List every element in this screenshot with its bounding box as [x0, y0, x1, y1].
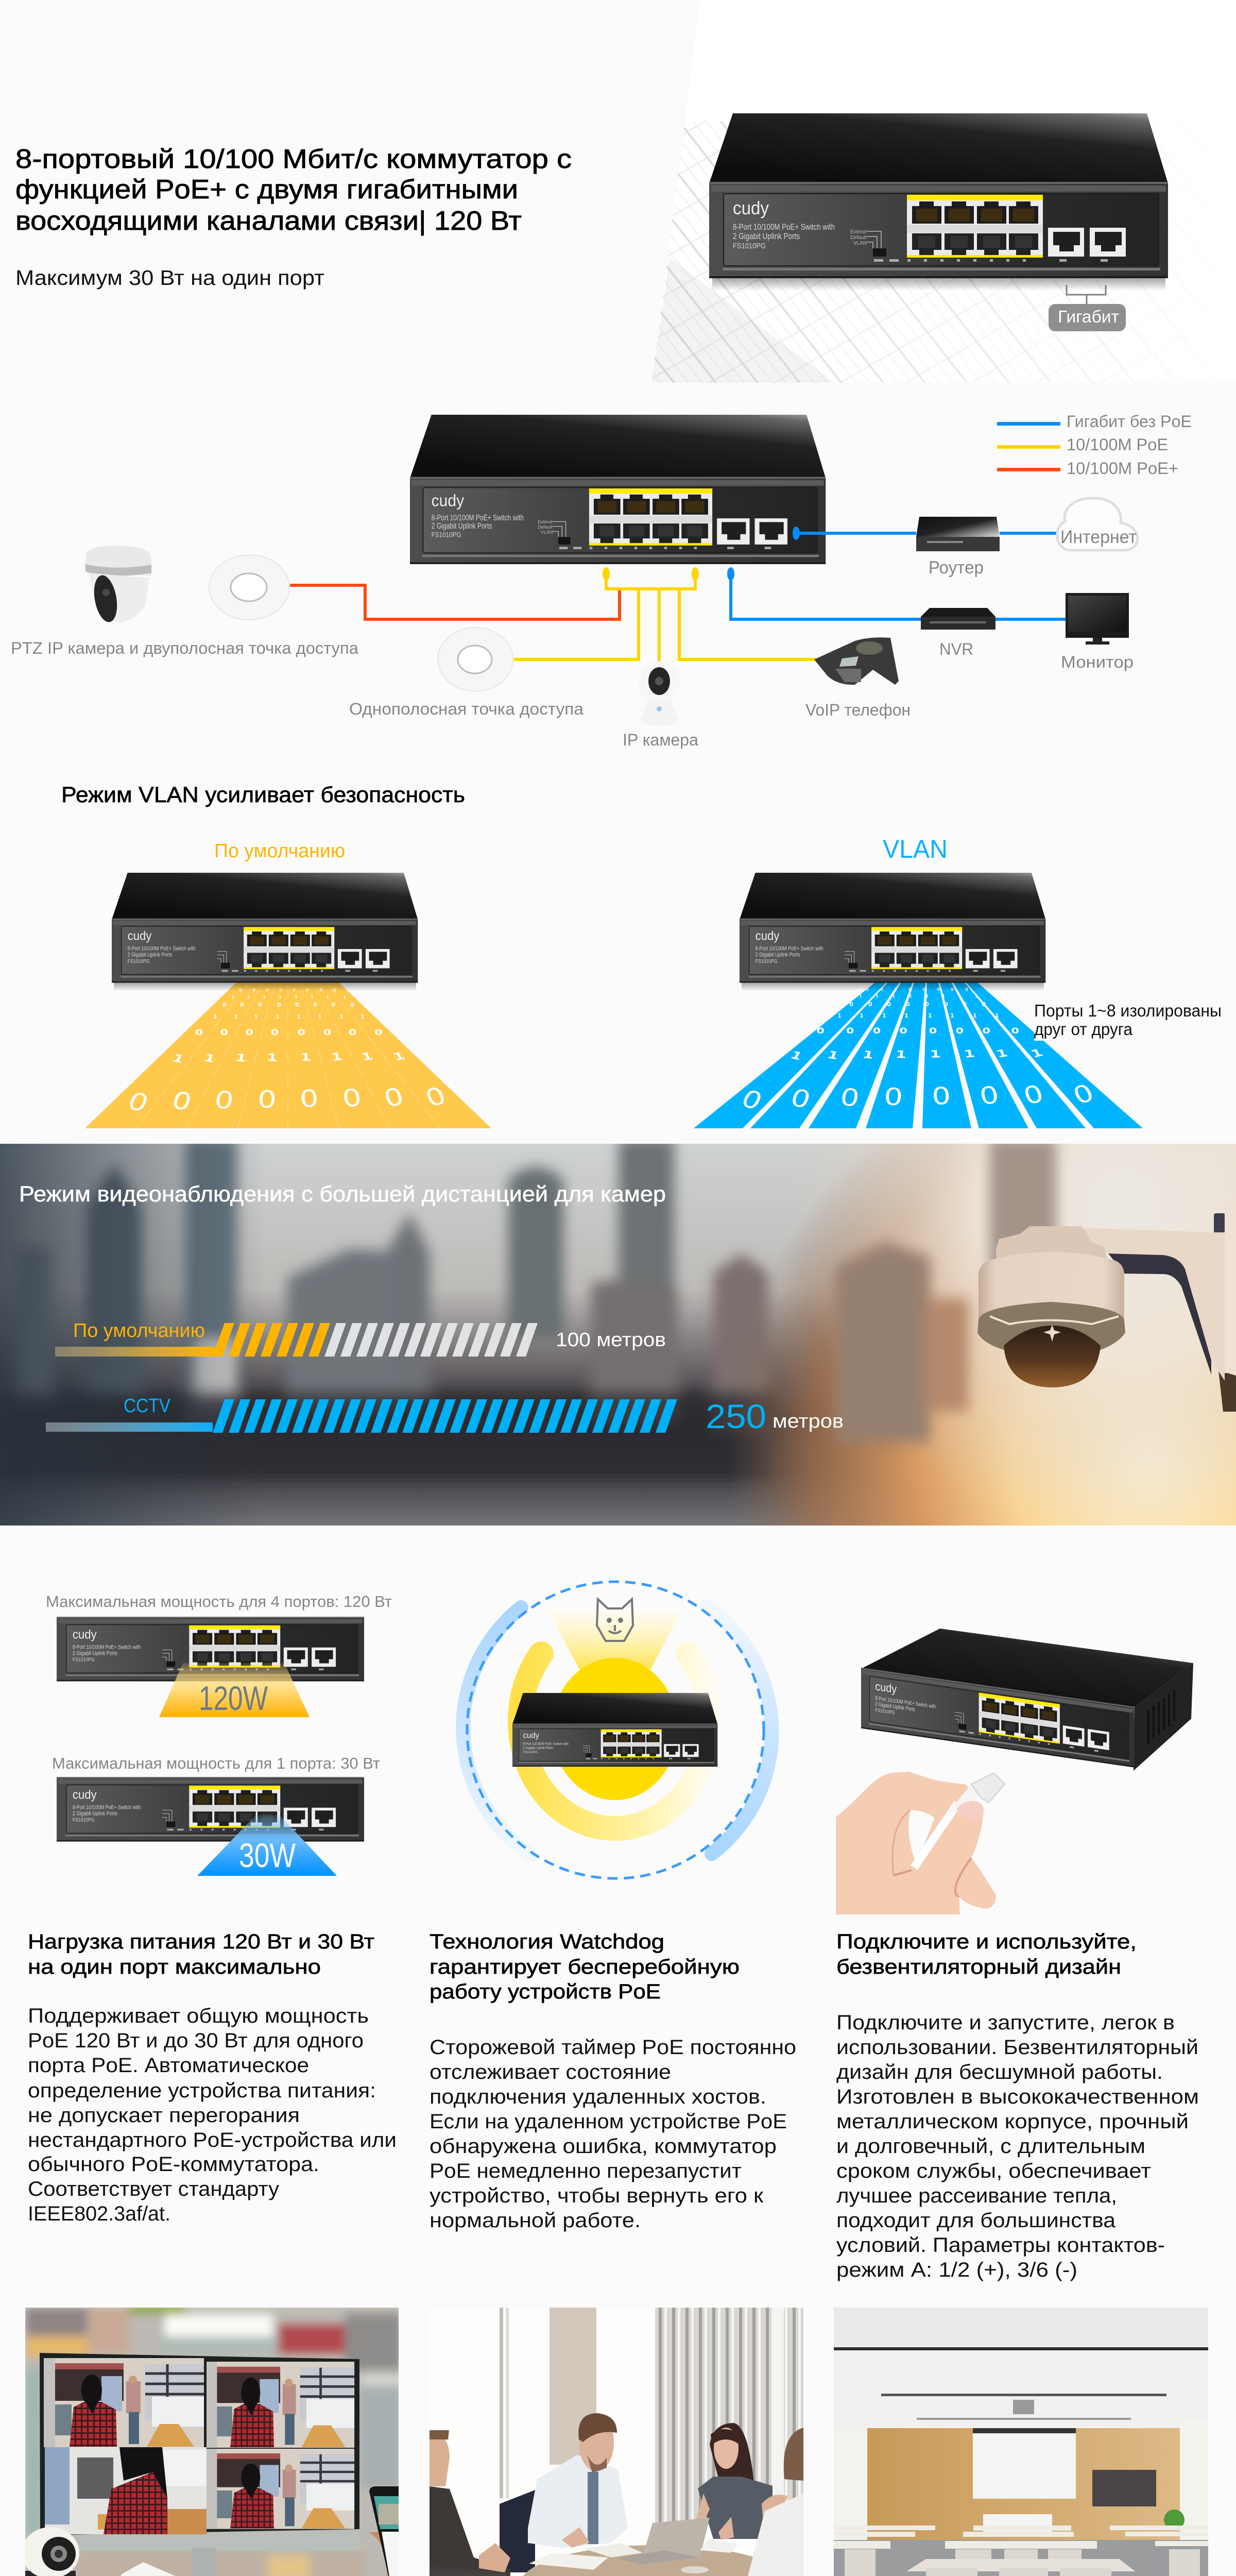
- dashed ring: [467, 1582, 764, 1878]
- column 1 body: PoE 120 Вт и до 30 Вт для одного: [28, 2029, 364, 2052]
- projection screen: [973, 2428, 1076, 2499]
- store background: [21, 2303, 404, 2576]
- column 3 body: подходит для большинства: [836, 2209, 1116, 2232]
- default distance bar: [55, 1323, 538, 1357]
- legend: 10/100M PoE: [1067, 435, 1168, 454]
- switch front 30W: [57, 1777, 364, 1841]
- switch front 30W: FS1010PG: [73, 1818, 95, 1823]
- topology switch: VLAN: [541, 530, 553, 535]
- column 3 body: [836, 2011, 1199, 2281]
- VLAN isolated data fan: 11111111: [788, 1046, 1045, 1063]
- default label: По умолчанию: [214, 840, 345, 862]
- icon: internet cloud: Интернет: [1060, 527, 1137, 547]
- topology switch: [410, 415, 826, 564]
- bullet camera: [87, 2562, 190, 2576]
- CCTV distance bar: [46, 1399, 677, 1433]
- woman: [695, 2423, 772, 2540]
- column 3 body: металлическом корпусе, прочный: [836, 2110, 1189, 2133]
- IP camera label: IP камера: [623, 731, 698, 749]
- icon: router: [916, 517, 1000, 551]
- VoIP label: VoIP телефон: [805, 701, 911, 719]
- switch image: VLAN: [853, 241, 867, 246]
- column 1 body: Поддерживает общую мощность: [28, 2005, 369, 2027]
- gigabit bracket: [1067, 285, 1106, 304]
- VLAN isolated data fan: [694, 982, 1143, 1128]
- single-band label: Однополосная точка доступа: [349, 700, 583, 718]
- column 1 body: порта PoE. Автоматическое: [28, 2054, 309, 2077]
- watchdog switch: 8-Port 10/100M PoE+ Switch with: [523, 1741, 569, 1746]
- switch front 30W: cudy: [73, 1788, 97, 1802]
- VLAN switch: [740, 873, 1045, 991]
- 1-port max label: Максимальная мощность для 1 порта: 30 Вт: [52, 1754, 380, 1772]
- legend: Гигабит без PoE: [1067, 412, 1192, 431]
- switch front 120W: 2 Gigabit Uplink Ports: [73, 1650, 117, 1656]
- default data fan: 11111111: [170, 1050, 407, 1066]
- default data fan: 00000000: [123, 1082, 451, 1118]
- wall display: [1092, 2470, 1156, 2506]
- column 1 heading: на один порт максимально: [28, 1956, 321, 1978]
- column 2 body: Сторожевой таймер PoE постоянно: [430, 2036, 796, 2059]
- default switch: [112, 873, 418, 991]
- column 3 heading: безвентиляторный дизайн: [836, 1956, 1121, 1978]
- switch image: Extend: [850, 229, 866, 235]
- column 1 body: IEEE802.3af/at.: [28, 2202, 170, 2225]
- dark chair: [430, 2565, 523, 2576]
- ports isolated note: Порты 1~8 изолированы: [1034, 1001, 1222, 1020]
- VLAN switch: 8-Port 10/100M PoE+ Switch with: [756, 946, 823, 952]
- column 1 body: нестандартного PoE-устройства или: [28, 2129, 397, 2151]
- switch image: cudy: [733, 197, 769, 218]
- VLAN isolated data fan: 11111111: [859, 994, 978, 998]
- banner title: Режим видеонаблюдения с большей дистанцией для камер: [19, 1182, 666, 1207]
- CCTV label: CCTV: [124, 1395, 171, 1417]
- column 3 body: условий. Параметры контактов-: [836, 2234, 1165, 2257]
- VLAN isolated data fan: 00000000: [866, 987, 968, 992]
- VLAN isolated data fan: 00000000: [816, 1026, 1019, 1036]
- default data fan: [85, 982, 491, 1128]
- VLAN switch: cudy: [756, 929, 779, 943]
- topology switch: Extend: [538, 519, 552, 524]
- column 1 heading: Нагрузка питания 120 Вт и 30 Вт: [28, 1930, 374, 1953]
- 250 m value: 250: [706, 1397, 766, 1435]
- watchdog switch: FS1010PG: [523, 1751, 538, 1754]
- legend: 10/100M PoE+: [1067, 459, 1178, 478]
- column 2 body: отслеживает состояние: [430, 2061, 671, 2083]
- panel: network topology: [11, 412, 1192, 749]
- monitor label: Монитор: [1061, 653, 1134, 671]
- VLAN isolated data fan: 00000000: [849, 1001, 986, 1008]
- 120W beam: 120W: [199, 1679, 268, 1717]
- center man: [528, 2413, 628, 2548]
- icon: PTZ camera: [85, 546, 151, 624]
- panel: VoIP conference photo: [430, 2308, 803, 2576]
- rear tables: [834, 2526, 1208, 2549]
- watchdog switch: 2 Gigabit Uplink Ports: [523, 1745, 553, 1750]
- column 1 body: Соответствует стандарту: [28, 2178, 279, 2200]
- VLAN switch: FS1010PG: [756, 959, 778, 964]
- gigabit badge: [1049, 304, 1126, 331]
- topology switch: 8-Port 10/100M PoE+ Switch with: [432, 514, 524, 522]
- perspective switch: 2 Gigabit Uplink Ports: [875, 1701, 915, 1713]
- panel: watchdog diagram: [463, 1582, 771, 1878]
- table: [520, 2545, 792, 2576]
- column 2 body: обнаружена ошибка, коммутатор: [430, 2135, 777, 2158]
- white PTZ camera: [22, 2527, 85, 2576]
- panel: surveillance photo: [21, 2303, 404, 2576]
- column 3 heading: [836, 1930, 1137, 1978]
- orange PoE+ line: [290, 585, 620, 619]
- VLAN label: VLAN: [883, 835, 948, 863]
- default switch: 8-Port 10/100M PoE+ Switch with: [128, 946, 196, 952]
- column 1 heading: [28, 1930, 374, 1978]
- ports isolated note: [1034, 993, 1236, 1041]
- middle chairs: [926, 2568, 1111, 2576]
- 30W beam: 30W: [239, 1836, 296, 1874]
- phone and hand: [368, 2486, 404, 2576]
- VLAN switch: 2 Gigabit Uplink Ports: [756, 952, 800, 958]
- topology switch: FS1010PG: [432, 531, 461, 538]
- title: 8-портовый 10/100 Мбит/с коммутатор с: [15, 144, 572, 174]
- 250 m value: [708, 1404, 843, 1432]
- 4-port max label: Максимальная мощность для 4 портов: 120 Вт: [46, 1592, 392, 1611]
- perspective switch: [861, 1629, 1193, 1771]
- column 1 body: обычного PoE-коммутатора.: [28, 2153, 319, 2176]
- yellow beam: [544, 1603, 686, 1669]
- laptop and papers: [529, 2518, 787, 2576]
- left person: [430, 2430, 510, 2576]
- room background: [430, 2308, 803, 2576]
- blue uplink lines: [727, 527, 1066, 619]
- middle table: [906, 2559, 1135, 2571]
- VLAN isolated data fan: 11111111: [837, 1012, 999, 1019]
- column 3 heading: Подключите и используйте,: [836, 1930, 1137, 1953]
- column 2 heading: Технология Watchdog: [430, 1930, 664, 1953]
- column 2 heading: работу устройств PoE: [430, 1980, 661, 2003]
- perspective switch: 8-Port 10/100M PoE+ Switch with: [875, 1696, 936, 1710]
- column 1 body: не допускает перегорания: [28, 2104, 300, 2127]
- switch image: Default: [850, 235, 867, 241]
- icon: watchdog: [597, 1599, 633, 1641]
- icon: NVR: [921, 608, 995, 630]
- legend: [997, 412, 1192, 478]
- icon: dome camera: [977, 1203, 1236, 1412]
- column 2 body: подключения удаленных хостов.: [430, 2086, 766, 2108]
- watchdog switch: cudy: [523, 1731, 539, 1740]
- column 3 body: лучшее рассеивание тепла,: [836, 2184, 1117, 2207]
- panel: hero: [16, 113, 1168, 383]
- perspective switch: cudy: [875, 1680, 897, 1696]
- switch front 30W: 8-Port 10/100M PoE+ Switch with: [73, 1804, 141, 1810]
- room shell: [834, 2308, 1208, 2576]
- column 2 heading: [430, 1930, 740, 2003]
- column 3 body: использовании. Безвентиляторный: [836, 2036, 1198, 2059]
- 30W beam: [197, 1815, 337, 1876]
- panel: power load: [46, 1592, 392, 1876]
- switch image: 2 Gigabit Uplink Ports: [733, 231, 800, 241]
- default data fan: 00000000: [239, 988, 336, 992]
- 100 m value: 100 метров: [556, 1329, 666, 1351]
- column 3 body: дизайн для бесшумной работы.: [836, 2061, 1163, 2083]
- column 2 heading: гарантирует бесперебойную: [430, 1956, 740, 1978]
- NVR label: NVR: [939, 640, 973, 658]
- default data fan: 11111111: [213, 1013, 365, 1020]
- column 2 body: нормальной работе.: [430, 2209, 641, 2232]
- column 3 body: сроком службы, обеспечивает: [836, 2160, 1151, 2182]
- monitor with 4-camera view: [40, 2353, 359, 2535]
- router label: Роутер: [929, 558, 984, 578]
- 120W beam: [159, 1663, 310, 1717]
- switch front 120W: [57, 1617, 364, 1681]
- right person: [743, 2428, 803, 2576]
- projector: [1013, 2400, 1034, 2414]
- icon: single-band access point: [438, 628, 513, 691]
- default data fan: 00000000: [222, 1002, 354, 1008]
- gigabit badge: Гигабит: [1058, 307, 1119, 326]
- panel: feature text columns: [28, 1930, 1199, 2281]
- yellow crescent: [520, 1654, 710, 1828]
- topology switch: Default: [538, 524, 553, 530]
- panel: VLAN: [61, 783, 1236, 1128]
- podium and plant: [983, 2510, 1184, 2533]
- icon: IP camera: [639, 661, 680, 725]
- watchdog switch: [512, 1693, 717, 1767]
- yellow core: [552, 1658, 678, 1800]
- panel: plug and play: [836, 1629, 1193, 1914]
- column 2 body: устройство, чтобы вернуть его к: [430, 2184, 764, 2207]
- topology switch: cudy: [432, 491, 465, 510]
- default switch: cudy: [128, 929, 151, 943]
- blurred city background: [0, 1139, 1236, 1535]
- subtitle: Максимум 30 Вт на один порт: [15, 266, 324, 290]
- column 3 body: Изготовлен в высококачественном: [836, 2086, 1199, 2108]
- icon: dual-band access point: [209, 555, 289, 620]
- column 1 body: определение устройства питания:: [28, 2079, 376, 2102]
- column 2 body: Если на удаленном устройстве PoE: [430, 2110, 787, 2133]
- ports isolated note: друг от друга: [1034, 1020, 1133, 1039]
- 250 m value: метров: [772, 1411, 844, 1432]
- switch front 120W: FS1010PG: [73, 1657, 95, 1663]
- column 3 body: и долговечный, с длительным: [836, 2135, 1145, 2158]
- title: [15, 144, 572, 236]
- hand holding cable: [836, 1772, 1005, 1914]
- switch front 120W: 8-Port 10/100M PoE+ Switch with: [73, 1644, 141, 1650]
- light blue arcs: [463, 1606, 771, 1855]
- topology switch: 2 Gigabit Uplink Ports: [432, 522, 492, 531]
- switch image: FS1010PG: [733, 242, 766, 250]
- rear chairs: [845, 2549, 1200, 2576]
- icon: monitor: [1066, 593, 1129, 645]
- monitor stand: [79, 2532, 359, 2576]
- default switch: FS1010PG: [128, 959, 150, 964]
- default switch: 2 Gigabit Uplink Ports: [128, 952, 173, 958]
- column 2 body: [430, 2036, 796, 2232]
- column 3 body: режим A: 1/2 (+), 3/6 (-): [836, 2259, 1077, 2281]
- column 2 body: PoE немедленно перезапустит: [430, 2160, 742, 2182]
- title: восходящими каналами связи| 120 Вт: [15, 206, 522, 236]
- switch image: 8-Port 10/100M PoE+ Switch with: [733, 222, 835, 232]
- default data fan: 00000000: [195, 1027, 383, 1037]
- yellow PoE lines: [514, 567, 816, 662]
- panel: Wi-Fi classroom photo: [834, 2308, 1208, 2576]
- perspective switch: FS1010PG: [875, 1707, 895, 1715]
- switch front 30W: 2 Gigabit Uplink Ports: [73, 1810, 117, 1817]
- panel: CCTV banner: [0, 1139, 1236, 1535]
- default distance label: По умолчанию: [73, 1320, 205, 1342]
- navy chair back: [500, 2490, 535, 2572]
- switch image: [709, 113, 1168, 291]
- icon: internet cloud: [1057, 498, 1138, 550]
- title: функцией PoE+ с двумя гигабитными: [15, 175, 518, 205]
- switch front 120W: cudy: [73, 1628, 97, 1641]
- hero floor pattern background: [652, 121, 1067, 383]
- VLAN isolated data fan: 00000000: [736, 1079, 1099, 1116]
- PTZ label: PTZ IP камера и двуполосная точка доступа: [11, 639, 358, 657]
- column 1 body: [28, 2005, 397, 2225]
- VLAN heading: Режим VLAN усиливает безопасность: [61, 783, 465, 807]
- column 3 body: Подключите и запустите, легок в: [836, 2011, 1175, 2034]
- default data fan: 11111111: [231, 995, 346, 999]
- icon: VoIP phone: [814, 637, 899, 685]
